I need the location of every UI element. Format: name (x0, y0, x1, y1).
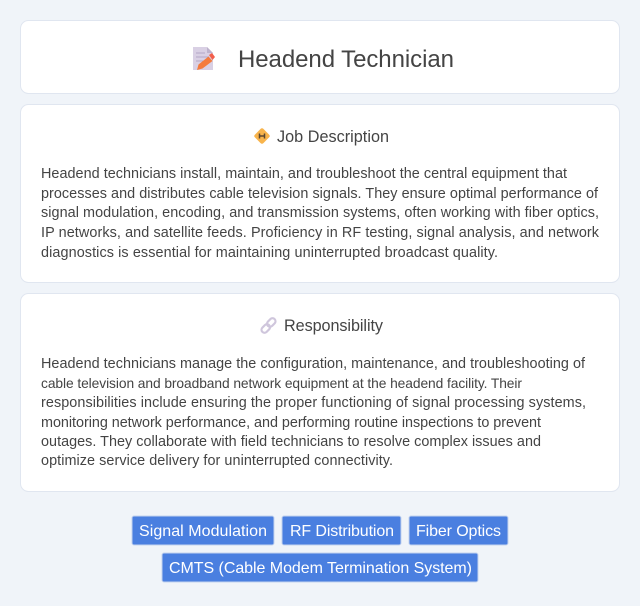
tag: signal modulation: Signal Modulation (139, 523, 267, 540)
heading: responsibility: Responsibility (284, 317, 384, 335)
text block: job description: processes and distributes cable television signals. They ensure optimal performance of (41, 186, 599, 202)
text block: responsibility: outages. They collaborate with field technicians to resolve complex issues and (41, 434, 541, 450)
text block: responsibility (41, 356, 586, 469)
text block: responsibility: cable television and broadband network equipment at the headend facility. Their (41, 376, 522, 391)
panel: title card (20, 20, 620, 94)
text block: job description: Headend technicians install, maintain, and troubleshoot the central equipment that (41, 166, 567, 182)
title: Headend Technician (238, 46, 454, 73)
text block: job description: diagnostics is essential for maintaining uninterrupted broadcast quality. (41, 245, 498, 261)
icon: chain link (260, 317, 277, 334)
icon: diamond road sign (254, 128, 270, 144)
text block: job description: signal modulation, encoding, and transmission systems, often working with fiber optics, (41, 205, 599, 221)
icon: document with pencil (193, 47, 215, 70)
tag: rf distribution: RF Distribution (290, 523, 394, 540)
tag: fiber optics: Fiber Optics (416, 523, 501, 540)
tag: cmts (162, 553, 478, 582)
text block: responsibility: optimize service delivery for uninterrupted connectivity. (41, 453, 393, 469)
heading: job description: Job Description (277, 128, 389, 146)
tag: rf distribution (282, 516, 401, 545)
panel: job description (20, 104, 620, 282)
text block: responsibility: Headend technicians manage the configuration, maintenance, and troubleshooting of (41, 356, 586, 372)
tag: signal modulation (132, 516, 274, 545)
panel: responsibility (20, 294, 620, 492)
text block: job description: IP networks, and satellite feeds. Proficiency in RF testing, signal analysis, and network (41, 225, 600, 241)
text block: responsibility: responsibilities include ensuring the proper functioning of signal processing systems, (41, 395, 586, 411)
text block: job description (41, 166, 600, 261)
tag: fiber optics (409, 516, 508, 545)
text block: responsibility: monitoring network performance, and performing routine inspections to prevent (41, 415, 541, 431)
tag: cmts: CMTS (Cable Modem Termination System) (169, 560, 472, 577)
